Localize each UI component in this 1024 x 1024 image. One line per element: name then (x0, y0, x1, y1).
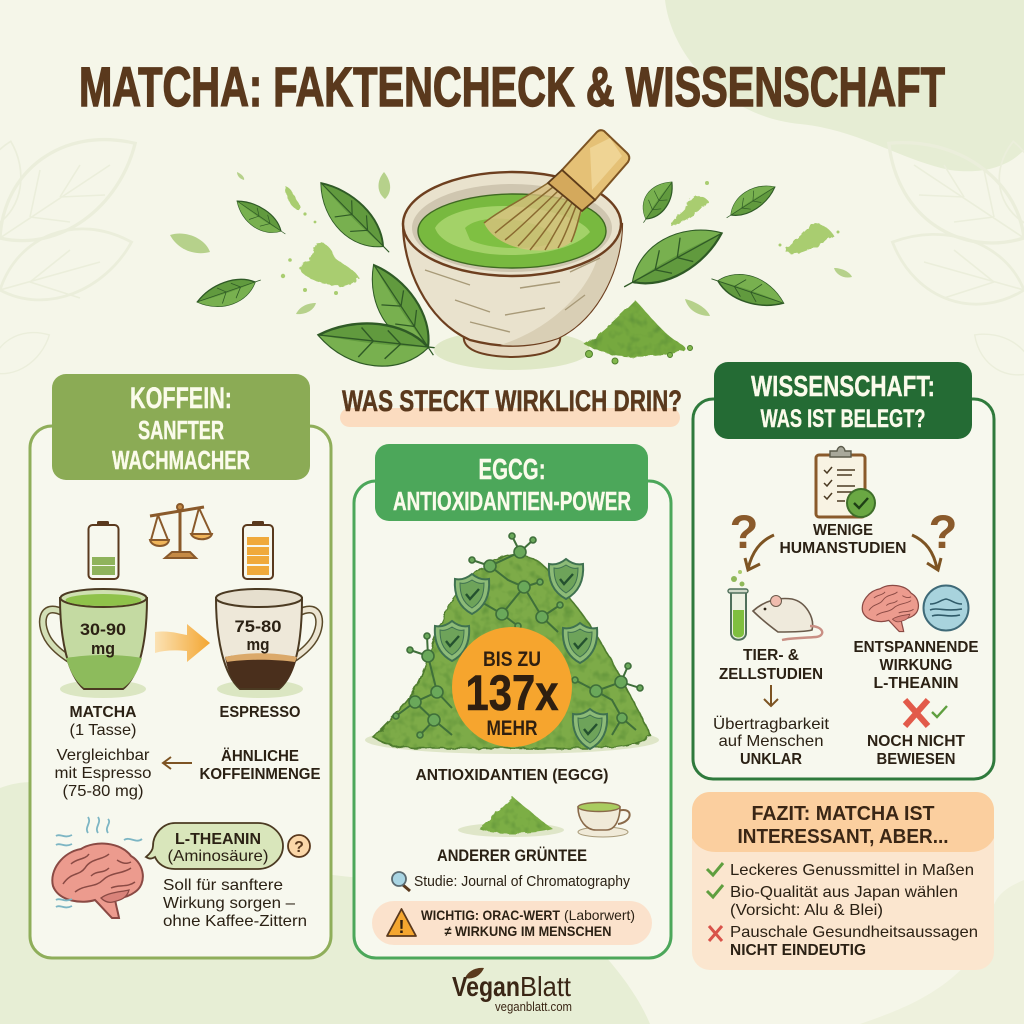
text: vergleichbar: (75-80 mg) (62, 783, 144, 800)
icon: question mark: ? (294, 839, 304, 856)
panel header: egcg: ANTIOXIDANTIEN-POWER (393, 488, 631, 516)
checklist: Pauschale Gesundheitsaussagen (730, 924, 978, 941)
panel header: koffein: KOFFEIN: (130, 382, 232, 415)
icon: scale (150, 504, 212, 558)
checklist: (Vorsicht: Alu & Blei) (730, 902, 883, 919)
text: soll fuer sanftere wirkung: Wirkung sorgen – (163, 895, 295, 912)
icon: brain with calm waves (52, 817, 143, 918)
icon: espresso cup (216, 589, 319, 698)
falling light leaves (170, 172, 852, 316)
text: tier und zellstudien: TIER- & (743, 647, 799, 664)
callout: wichtig: ≠ WIRKUNG IM MENSCHEN (444, 923, 612, 939)
label: matcha: MATCHA (70, 704, 137, 721)
icon: full battery (243, 521, 273, 579)
text: noch nicht bewiesen: NOCH NICHT (867, 733, 965, 750)
molecules (396, 536, 640, 735)
callout: wichtig (372, 901, 652, 945)
bowl shadow (434, 330, 590, 370)
panel header: fazit (692, 792, 994, 852)
illustration: matcha bowl with leaves (170, 130, 852, 372)
text: noch nicht bewiesen (867, 733, 965, 768)
arrow: matcha to espresso (155, 624, 210, 662)
panel header: wissenschaft: WAS IST BELEGT? (760, 405, 926, 433)
text: uebertragbarkeit: Übertragbarkeit (713, 715, 830, 733)
label: espresso: ESPRESSO (220, 704, 300, 721)
text: vergleichbar: mit Espresso (54, 765, 152, 782)
checklist: Bio-Qualität aus Japan wählen (730, 884, 958, 901)
powder pile (584, 300, 692, 364)
badge: 137x: BIS ZU (483, 648, 541, 671)
panel: fazit (692, 792, 994, 970)
text: aehnliche koffeinmenge: ÄHNLICHE (221, 747, 299, 765)
checklist: Leckeres Genussmittel in Maßen (730, 862, 974, 879)
icon: matcha cup (43, 589, 147, 698)
shields (455, 574, 489, 614)
panel header: fazit: INTERESSANT, ABER... (738, 826, 948, 848)
icon: espresso cup: 75-80 (234, 617, 282, 636)
text: soll fuer sanftere wirkung: ohne Kaffee-Zittern (163, 913, 307, 930)
panel: egcg (354, 444, 671, 958)
text: entspannende wirkung: WIRKUNG (880, 657, 952, 674)
icon: cross and check (905, 700, 947, 726)
callout: l-theanin: L-THEANIN (175, 831, 261, 848)
icon: low battery (88, 521, 118, 579)
text: uebertragbarkeit (713, 715, 830, 768)
text: aehnliche koffeinmenge (200, 747, 321, 783)
icon: green tea cup (578, 802, 630, 837)
panel header: egcg (375, 444, 648, 521)
label: matcha: (1 Tasse) (70, 722, 136, 739)
subheading: was steckt wirklich drin: WAS STECKT WIRKLICH DRIN? (342, 385, 682, 418)
decorative leaves right (865, 116, 1024, 387)
icon: mouse (753, 596, 822, 640)
icon: matcha cup: mg (91, 639, 115, 658)
panel header: koffein: WACHMACHER (112, 447, 250, 475)
text: studie: Studie: Journal of Chromatography (414, 874, 631, 890)
panel: wissenschaft (693, 362, 994, 779)
panel header: koffein (52, 374, 310, 480)
text: soll fuer sanftere wirkung: Soll für sanftere (163, 877, 283, 894)
checklist: NICHT EINDEUTIG (730, 942, 866, 959)
icon: espresso cup: mg (246, 635, 270, 654)
text: vergleichbar (54, 747, 152, 800)
label: matcha (70, 704, 137, 739)
bowl (403, 172, 622, 357)
text: aehnliche koffeinmenge: KOFFEINMENGE (200, 766, 321, 783)
text: wenige humanstudien: WENIGE (813, 522, 873, 539)
logo: veganblatt: Vegan (452, 971, 520, 1002)
text: vergleichbar: Vergleichbar (56, 747, 150, 764)
arrow: down (764, 685, 778, 706)
label: antioxidantien: ANTIOXIDANTIEN (EGCG) (416, 767, 608, 784)
callout: l-theanin (146, 823, 283, 869)
icon: question mark left: ? (730, 505, 758, 558)
icon: magnifier (392, 872, 410, 891)
panel header: fazit: FAZIT: MATCHA IST (752, 803, 934, 825)
arrow: left branch (745, 535, 774, 570)
green leaves (194, 174, 788, 372)
callout: wichtig: (Laborwert) (564, 907, 635, 923)
callout: l-theanin: (Aminosäure) (168, 848, 268, 865)
icon: relaxation waves (924, 586, 968, 630)
icon: matcha cup: 30-90 (80, 620, 126, 639)
icon: question mark (288, 835, 310, 857)
text: entspannende wirkung (854, 639, 979, 692)
text: uebertragbarkeit: UNKLAR (740, 751, 802, 768)
text: soll fuer sanftere wirkung (163, 877, 307, 930)
panel header: wissenschaft (714, 362, 972, 439)
callout: wichtig: WICHTIG: ORAC-WERT (421, 907, 560, 923)
badge: 137x (452, 627, 572, 747)
icon: brain small (862, 585, 918, 632)
text: tier und zellstudien: ZELLSTUDIEN (719, 666, 823, 683)
text: entspannende wirkung: L-THEANIN (874, 675, 958, 692)
logo: veganblatt (452, 968, 572, 1014)
badge: 137x: 137x (466, 665, 559, 721)
text: entspannende wirkung: ENTSPANNENDE (854, 639, 979, 656)
logo: veganblatt: Blatt (520, 971, 571, 1002)
arrow: right branch (912, 535, 941, 570)
panel header: koffein: SANFTER (138, 417, 224, 445)
panel header: wissenschaft: WISSENSCHAFT: (751, 371, 935, 403)
text: noch nicht bewiesen: BEWIESEN (876, 751, 956, 768)
checklist (707, 862, 978, 959)
logo: veganblatt: veganblatt.com (495, 999, 572, 1014)
text: wenige humanstudien (780, 522, 906, 557)
icon: question mark right: ? (929, 505, 957, 558)
icon: small powder pile (458, 797, 564, 837)
text: uebertragbarkeit: auf Menschen (718, 733, 824, 750)
powder clouds (281, 181, 840, 295)
icon: test tube (728, 570, 748, 640)
whisk (484, 130, 629, 251)
panel header: egcg: EGCG: (478, 454, 546, 486)
text: tier und zellstudien (719, 647, 823, 683)
icon: clipboard with check (816, 446, 875, 517)
chart: matcha antioxidant pile (365, 533, 659, 754)
label: anderer gruentee: ANDERER GRÜNTEE (437, 846, 587, 865)
badge: 137x: MEHR (486, 717, 538, 740)
text: wenige humanstudien: HUMANSTUDIEN (780, 540, 906, 557)
arrow: back (163, 757, 192, 769)
panel: koffein (30, 374, 331, 958)
subheading: was steckt wirklich drin (340, 385, 682, 427)
callout: wichtig: ! (398, 917, 404, 937)
decorative leaves left (0, 110, 154, 384)
